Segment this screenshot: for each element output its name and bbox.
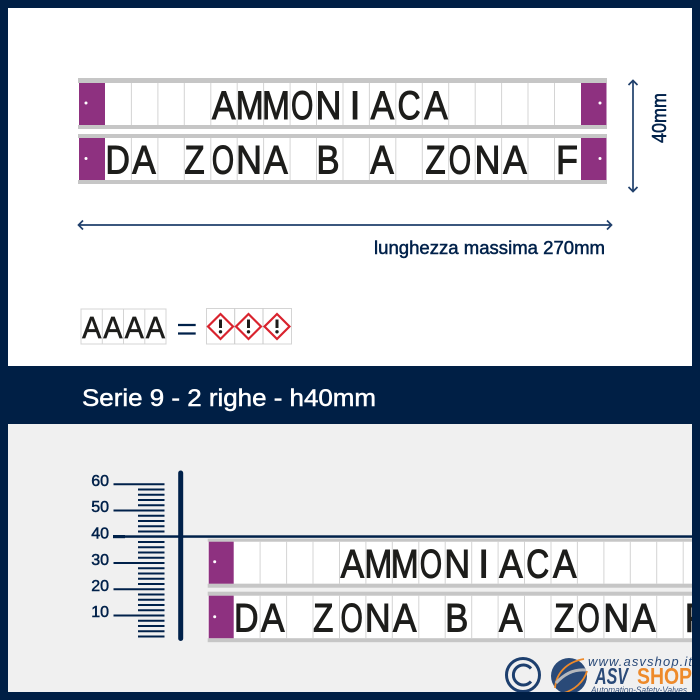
panel: top white label diagram [8, 8, 692, 366]
text row: DA ZONA B A ZONA F: D [105, 137, 130, 182]
text row: AMMONIACA: I [478, 543, 489, 587]
text row: DA ZONA B A ZONA F: A [261, 595, 285, 640]
text row: AMMONIACA: C [526, 541, 549, 587]
heading: series title: Serie 9 - 2 righe - h40mm [82, 385, 376, 412]
text row: DA ZONA B A ZONA F: A [503, 137, 528, 182]
ruler scale labels [91, 473, 109, 621]
icon: copyright symbol [506, 658, 540, 692]
dimension label: 40mm: 40mm [649, 93, 671, 143]
text row: DA ZONA B A ZONA F [105, 137, 578, 183]
text row: DA ZONA B A ZONA F: N [236, 139, 262, 183]
logo: ASV Shop [505, 654, 693, 695]
horizontal 40mm reference line [113, 535, 692, 538]
text row: DA ZONA B A ZONA F: O [212, 138, 234, 183]
text row: DA ZONA B A ZONA F: A [632, 595, 656, 640]
icon: hazard diamond 2 [236, 314, 261, 339]
icon: globe [551, 658, 587, 694]
text row: DA ZONA B A ZONA F: Z [313, 596, 333, 640]
text row: AMMONIACA: A [553, 542, 577, 586]
text row: DA ZONA B A ZONA F: A [370, 137, 395, 182]
text row: DA ZONA B A ZONA F [234, 595, 700, 641]
arrow: height dimension [628, 80, 638, 192]
text row: DA ZONA B A ZONA F: D [234, 595, 259, 640]
text row: DA ZONA B A ZONA F: O [577, 596, 600, 641]
text row: AMMONIACA: A [371, 83, 395, 127]
text row: AMMONIACA: M [391, 542, 419, 586]
text row: DA ZONA B A ZONA F: N [365, 597, 391, 641]
panel: bottom scale diagram [8, 424, 700, 695]
ruler scale labels: 20 [91, 578, 109, 595]
ruler scale labels: 10 [91, 604, 109, 621]
text row: DA ZONA B A ZONA F: Z [184, 138, 205, 182]
text row: AMMONIACA: N [444, 543, 470, 587]
logo url: www.asvshop.it [588, 654, 693, 669]
logo tagline: Automation-Safety-Valves [590, 685, 687, 695]
icon: hazard diamond 3 [264, 314, 290, 339]
text row: AMMONIACA: A [499, 542, 524, 586]
label strip: two rows [78, 78, 607, 184]
text row: AMMONIACA [212, 83, 449, 128]
ruler ticks [114, 484, 164, 636]
text row: DA ZONA B A ZONA F: Z [425, 138, 446, 182]
text row: DA ZONA B A ZONA F: O [449, 138, 471, 183]
legend: AAAA cells [81, 309, 166, 345]
text row: AMMONIACA: M [364, 542, 392, 586]
text row: DA ZONA B A ZONA F: A [132, 137, 157, 182]
text row: DA ZONA B A ZONA F: N [474, 139, 501, 183]
legend: AAAA cells: A [82, 311, 101, 345]
text row: AMMONIACA: O [291, 83, 313, 128]
text row: AMMONIACA: A [424, 83, 449, 127]
text row: AMMONIACA: N [315, 84, 342, 128]
legend: AAAA cells: A [125, 311, 144, 345]
text row: DA ZONA B A ZONA F: B [445, 595, 468, 640]
ruler scale labels: 30 [91, 552, 109, 569]
text row: DA ZONA B A ZONA F: Z [554, 596, 574, 640]
text row: DA ZONA B A ZONA F: N [603, 597, 629, 641]
vertical axis bar [178, 473, 183, 638]
legend: AAAA cells: A [146, 311, 165, 345]
text row: AMMONIACA: A [341, 542, 365, 586]
text row: AMMONIACA: C [397, 83, 421, 128]
ruler scale labels: 60 [91, 473, 109, 490]
text row: AMMONIACA: M [262, 83, 290, 128]
label strip: scaled sample [208, 539, 700, 642]
text row: AMMONIACA: O [420, 542, 442, 587]
legend: AAAA cells: A [103, 311, 123, 345]
logo name: ASV: ASV [594, 663, 629, 689]
text row: DA ZONA B A ZONA F: F [556, 139, 578, 183]
ruler scale labels: 50 [91, 499, 109, 516]
text row: DA ZONA B A ZONA F: A [499, 595, 523, 640]
legend: hazard pictograms [206, 308, 292, 344]
text row: DA ZONA B A ZONA F: A [264, 137, 289, 182]
text row: DA ZONA B A ZONA F: B [316, 137, 340, 182]
icon: hazard diamond 1 [208, 314, 233, 339]
arrow: length dimension [78, 220, 612, 230]
text row: AMMONIACA: M [236, 83, 264, 128]
text row: AMMONIACA: I [349, 84, 361, 128]
text row: DA ZONA B A ZONA F: O [340, 596, 363, 641]
text row: AMMONIACA: A [212, 83, 236, 127]
equals sign [178, 325, 196, 334]
ruler scale labels: 40 [91, 526, 109, 542]
text row: DA ZONA B A ZONA F: A [393, 595, 417, 640]
dimension label: lunghezza massima: lunghezza massima 270mm [374, 238, 605, 258]
text row: AMMONIACA [341, 541, 577, 587]
